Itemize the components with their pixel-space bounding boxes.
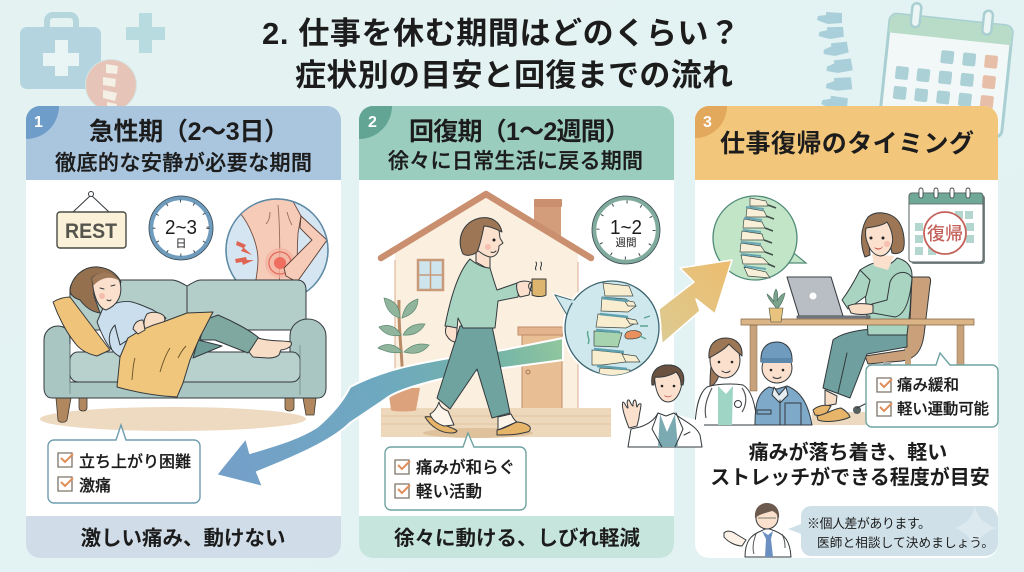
icon: return-to-work calendar — [909, 188, 985, 264]
arrow: orange arrow to return to work — [659, 260, 732, 344]
panel 1 subheading: 徹底的な安静が必要な期間 — [55, 152, 312, 175]
item: rising difficulty: 立ち上がり困難 — [79, 452, 191, 471]
icon: spine decoration — [817, 12, 853, 110]
note bubble — [788, 506, 998, 556]
panel 1 header — [26, 106, 341, 558]
desk — [750, 325, 964, 391]
person lying — [53, 267, 291, 397]
icon: clock 1-2 weeks: 1~2 — [610, 217, 642, 239]
illustration: waving doctor — [622, 365, 704, 447]
icon: return-to-work calendar: 復帰 — [927, 224, 963, 244]
title — [262, 16, 740, 93]
item: light activity: 軽い活動 — [416, 482, 482, 501]
icon: clock 2-3 days — [149, 196, 213, 260]
icon: clock 2-3 days: 日 — [176, 238, 186, 250]
body — [860, 258, 912, 335]
floor shadow — [40, 407, 306, 431]
number badge 3: 3 — [703, 114, 712, 131]
hair and face — [862, 213, 904, 270]
panel: acute phase — [26, 106, 341, 558]
panel 3 guidance text — [710, 440, 990, 489]
icon: clock 2-3 days: 2~3 — [165, 217, 197, 239]
title: 2. 仕事を休む期間はどのくらい？ — [262, 16, 740, 51]
icon: calendar decoration — [879, 1, 1014, 138]
arrow: blue recovery arrow to acute — [216, 338, 563, 487]
icon: REST sign — [57, 192, 126, 248]
number badge 1: 1 — [34, 114, 43, 131]
floor patch — [812, 412, 868, 425]
check icon 6 — [877, 402, 891, 416]
icon: clock 1-2 weeks: 週間 — [616, 237, 636, 249]
panel: recovery phase — [359, 106, 674, 558]
check icon 2 — [58, 477, 72, 491]
laptop — [787, 277, 870, 318]
panel 3 header — [695, 106, 998, 180]
item: pain relief: 痛み緩和 — [897, 376, 959, 394]
icon: first aid kit with spine — [20, 13, 165, 111]
note bubble: 医師と相談して決めましょう。 — [817, 536, 994, 550]
illustration: house — [381, 194, 611, 438]
item: severe pain: 激痛 — [79, 477, 111, 495]
callout: acute checklist — [48, 425, 200, 503]
item: pain eases: 痛みが和らぐ — [416, 457, 515, 477]
illustration: worker — [755, 342, 812, 425]
panel 3 guidance text: 痛みが落ち着き、軽い — [749, 440, 947, 464]
item: light exercise: 軽い運動可能 — [897, 400, 989, 418]
illustration: potted plant — [378, 298, 429, 412]
legs — [823, 328, 907, 398]
check icon 1 — [58, 453, 72, 467]
panel 2 heading: 回復期（1〜2週間） — [409, 118, 630, 146]
panel 3 heading: 仕事復帰のタイミング — [720, 129, 974, 158]
title: 症状別の目安と回復までの流れ — [295, 58, 733, 93]
illustration: woman working at laptop — [741, 213, 974, 425]
panel: return to work — [694, 106, 999, 558]
check icon 3 — [395, 460, 409, 474]
illustration: woman resting on sofa — [40, 267, 326, 431]
sofa — [44, 280, 326, 422]
illustration: walking woman — [425, 218, 546, 435]
callout: spine recovering — [555, 280, 660, 378]
chair — [853, 277, 931, 414]
panel 1 footer text: 激しい痛み、動けない — [80, 527, 286, 550]
plant — [767, 289, 785, 322]
callout: healthy spine — [713, 196, 806, 280]
check icon 5 — [877, 378, 891, 392]
panel 1 heading: 急性期（2〜3日） — [89, 118, 289, 146]
note bubble: ※個人差があります。 — [807, 516, 931, 531]
number badge 2: 2 — [368, 114, 377, 131]
callout: return checklist — [866, 353, 998, 427]
check icon 4 — [395, 484, 409, 498]
panel 2 header — [359, 106, 674, 558]
panel 2 footer text: 徐々に動ける、しびれ軽減 — [394, 526, 640, 550]
panel 2 subheading: 徐々に日常生活に戻る期間 — [388, 150, 643, 173]
callout: back pain — [225, 198, 329, 292]
icon: clock 1-2 weeks — [592, 196, 660, 264]
callout: recovery checklist — [385, 433, 526, 510]
illustration: nurse — [695, 338, 757, 425]
icon: REST sign: REST — [65, 220, 117, 243]
illustration: small doctor — [724, 503, 791, 557]
panel 3 guidance text: ストレッチができる程度が目安 — [710, 465, 990, 489]
